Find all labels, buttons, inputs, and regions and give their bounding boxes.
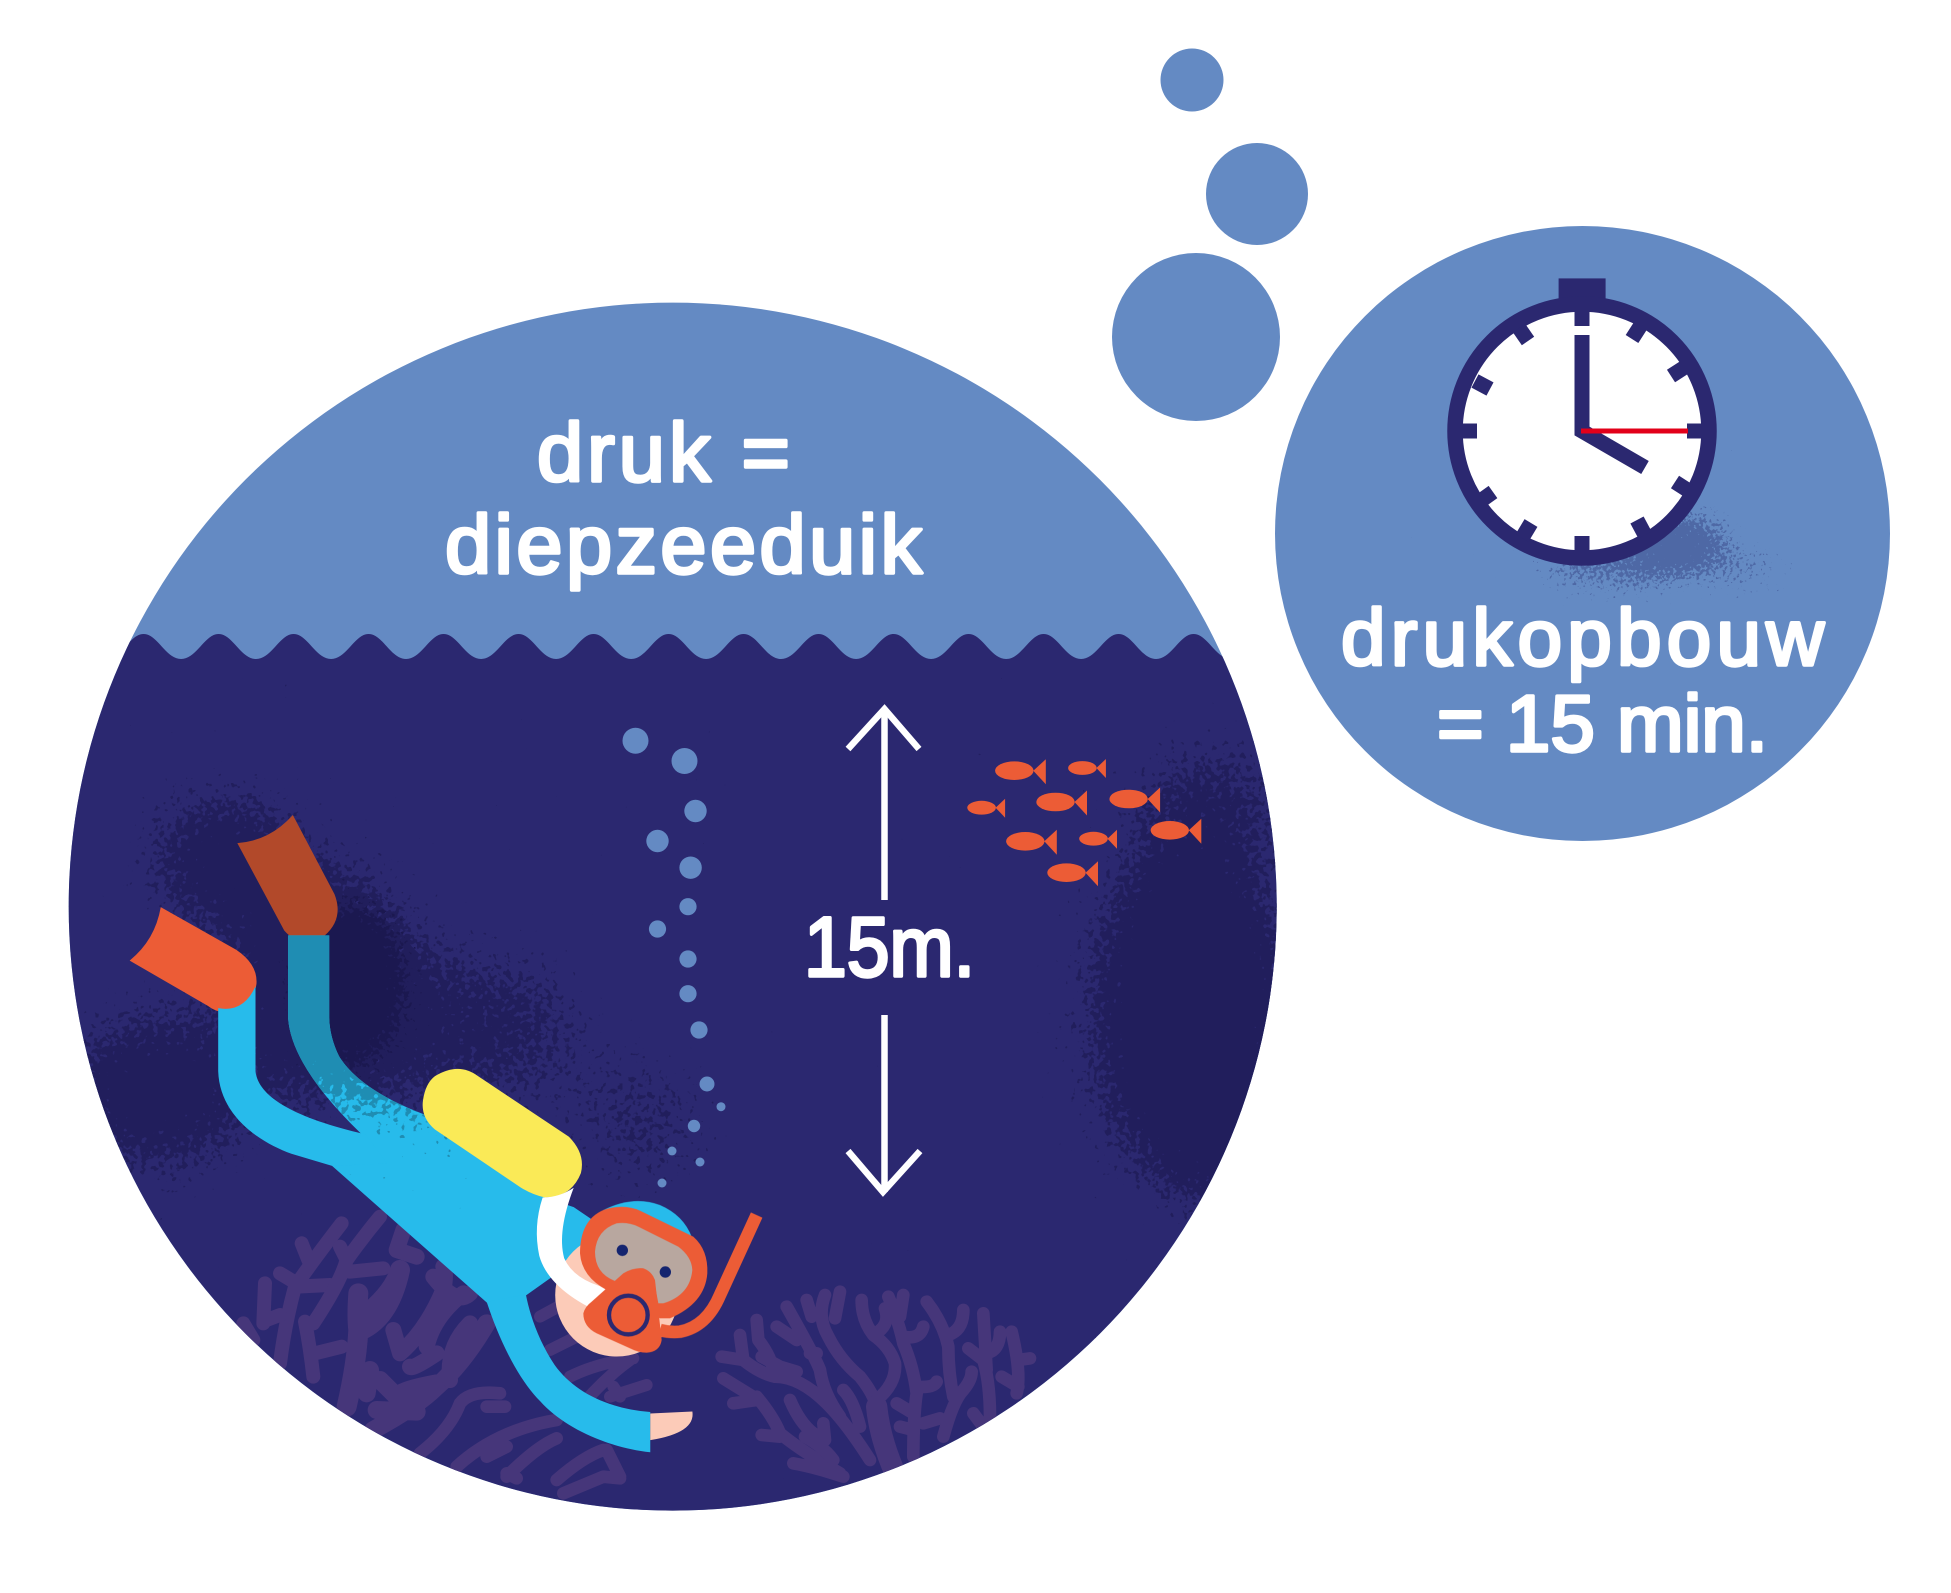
second hand xyxy=(1581,428,1688,434)
clock hands xyxy=(1582,335,1645,468)
head and mask xyxy=(580,1201,757,1353)
white strap xyxy=(537,1188,607,1307)
school of fish xyxy=(967,759,1201,886)
text: drukopbouw = 15 min.: drukopbouw xyxy=(1341,593,1824,682)
air tank xyxy=(423,1069,582,1197)
wetsuit: back leg and torso xyxy=(288,935,595,1303)
regulator xyxy=(583,1268,662,1353)
face xyxy=(555,1234,678,1356)
back fin xyxy=(237,815,338,942)
hand xyxy=(650,1412,693,1440)
arm xyxy=(487,1295,650,1452)
circle background: sky xyxy=(69,303,1277,1511)
bubble: medium xyxy=(1206,143,1308,245)
eyes xyxy=(617,1245,671,1278)
heading: druk = diepzeeduik: diepzeeduik xyxy=(445,498,922,591)
front fin xyxy=(130,907,257,1012)
arrow: down xyxy=(848,1015,920,1192)
water shading texture xyxy=(70,755,1300,1220)
wetsuit shading xyxy=(288,935,466,1209)
panel: diving scene xyxy=(60,303,1344,1530)
heading: druk = diepzeeduik: druk = xyxy=(537,406,790,499)
hood xyxy=(603,1201,692,1263)
air bubbles xyxy=(622,728,726,1188)
icon: stopwatch xyxy=(1455,278,1709,558)
coral: right xyxy=(722,1292,1030,1477)
depth label: 15m.: 15m. xyxy=(804,900,975,994)
water with wavy surface xyxy=(60,634,1344,1530)
regulator ring xyxy=(609,1296,648,1334)
bubble: large xyxy=(1112,253,1280,421)
bubble background xyxy=(1275,226,1890,841)
panel: pressure build-up stopwatch bubble xyxy=(1275,226,1890,841)
bubble: small xyxy=(1160,48,1224,112)
coral: left xyxy=(243,1217,647,1493)
mask lens xyxy=(595,1223,692,1303)
diver xyxy=(130,815,757,1452)
arrow: up xyxy=(848,708,919,900)
text: drukopbouw = 15 min. xyxy=(1341,593,1824,768)
deep shadow behind diver xyxy=(300,905,400,1065)
text: drukopbouw = 15 min.: = 15 min. xyxy=(1437,679,1768,768)
snorkel xyxy=(660,1215,757,1332)
mask frame xyxy=(580,1207,707,1318)
stopwatch shadow xyxy=(1530,519,1784,582)
front leg xyxy=(218,986,387,1166)
heading: druk = diepzeeduik xyxy=(445,406,922,591)
